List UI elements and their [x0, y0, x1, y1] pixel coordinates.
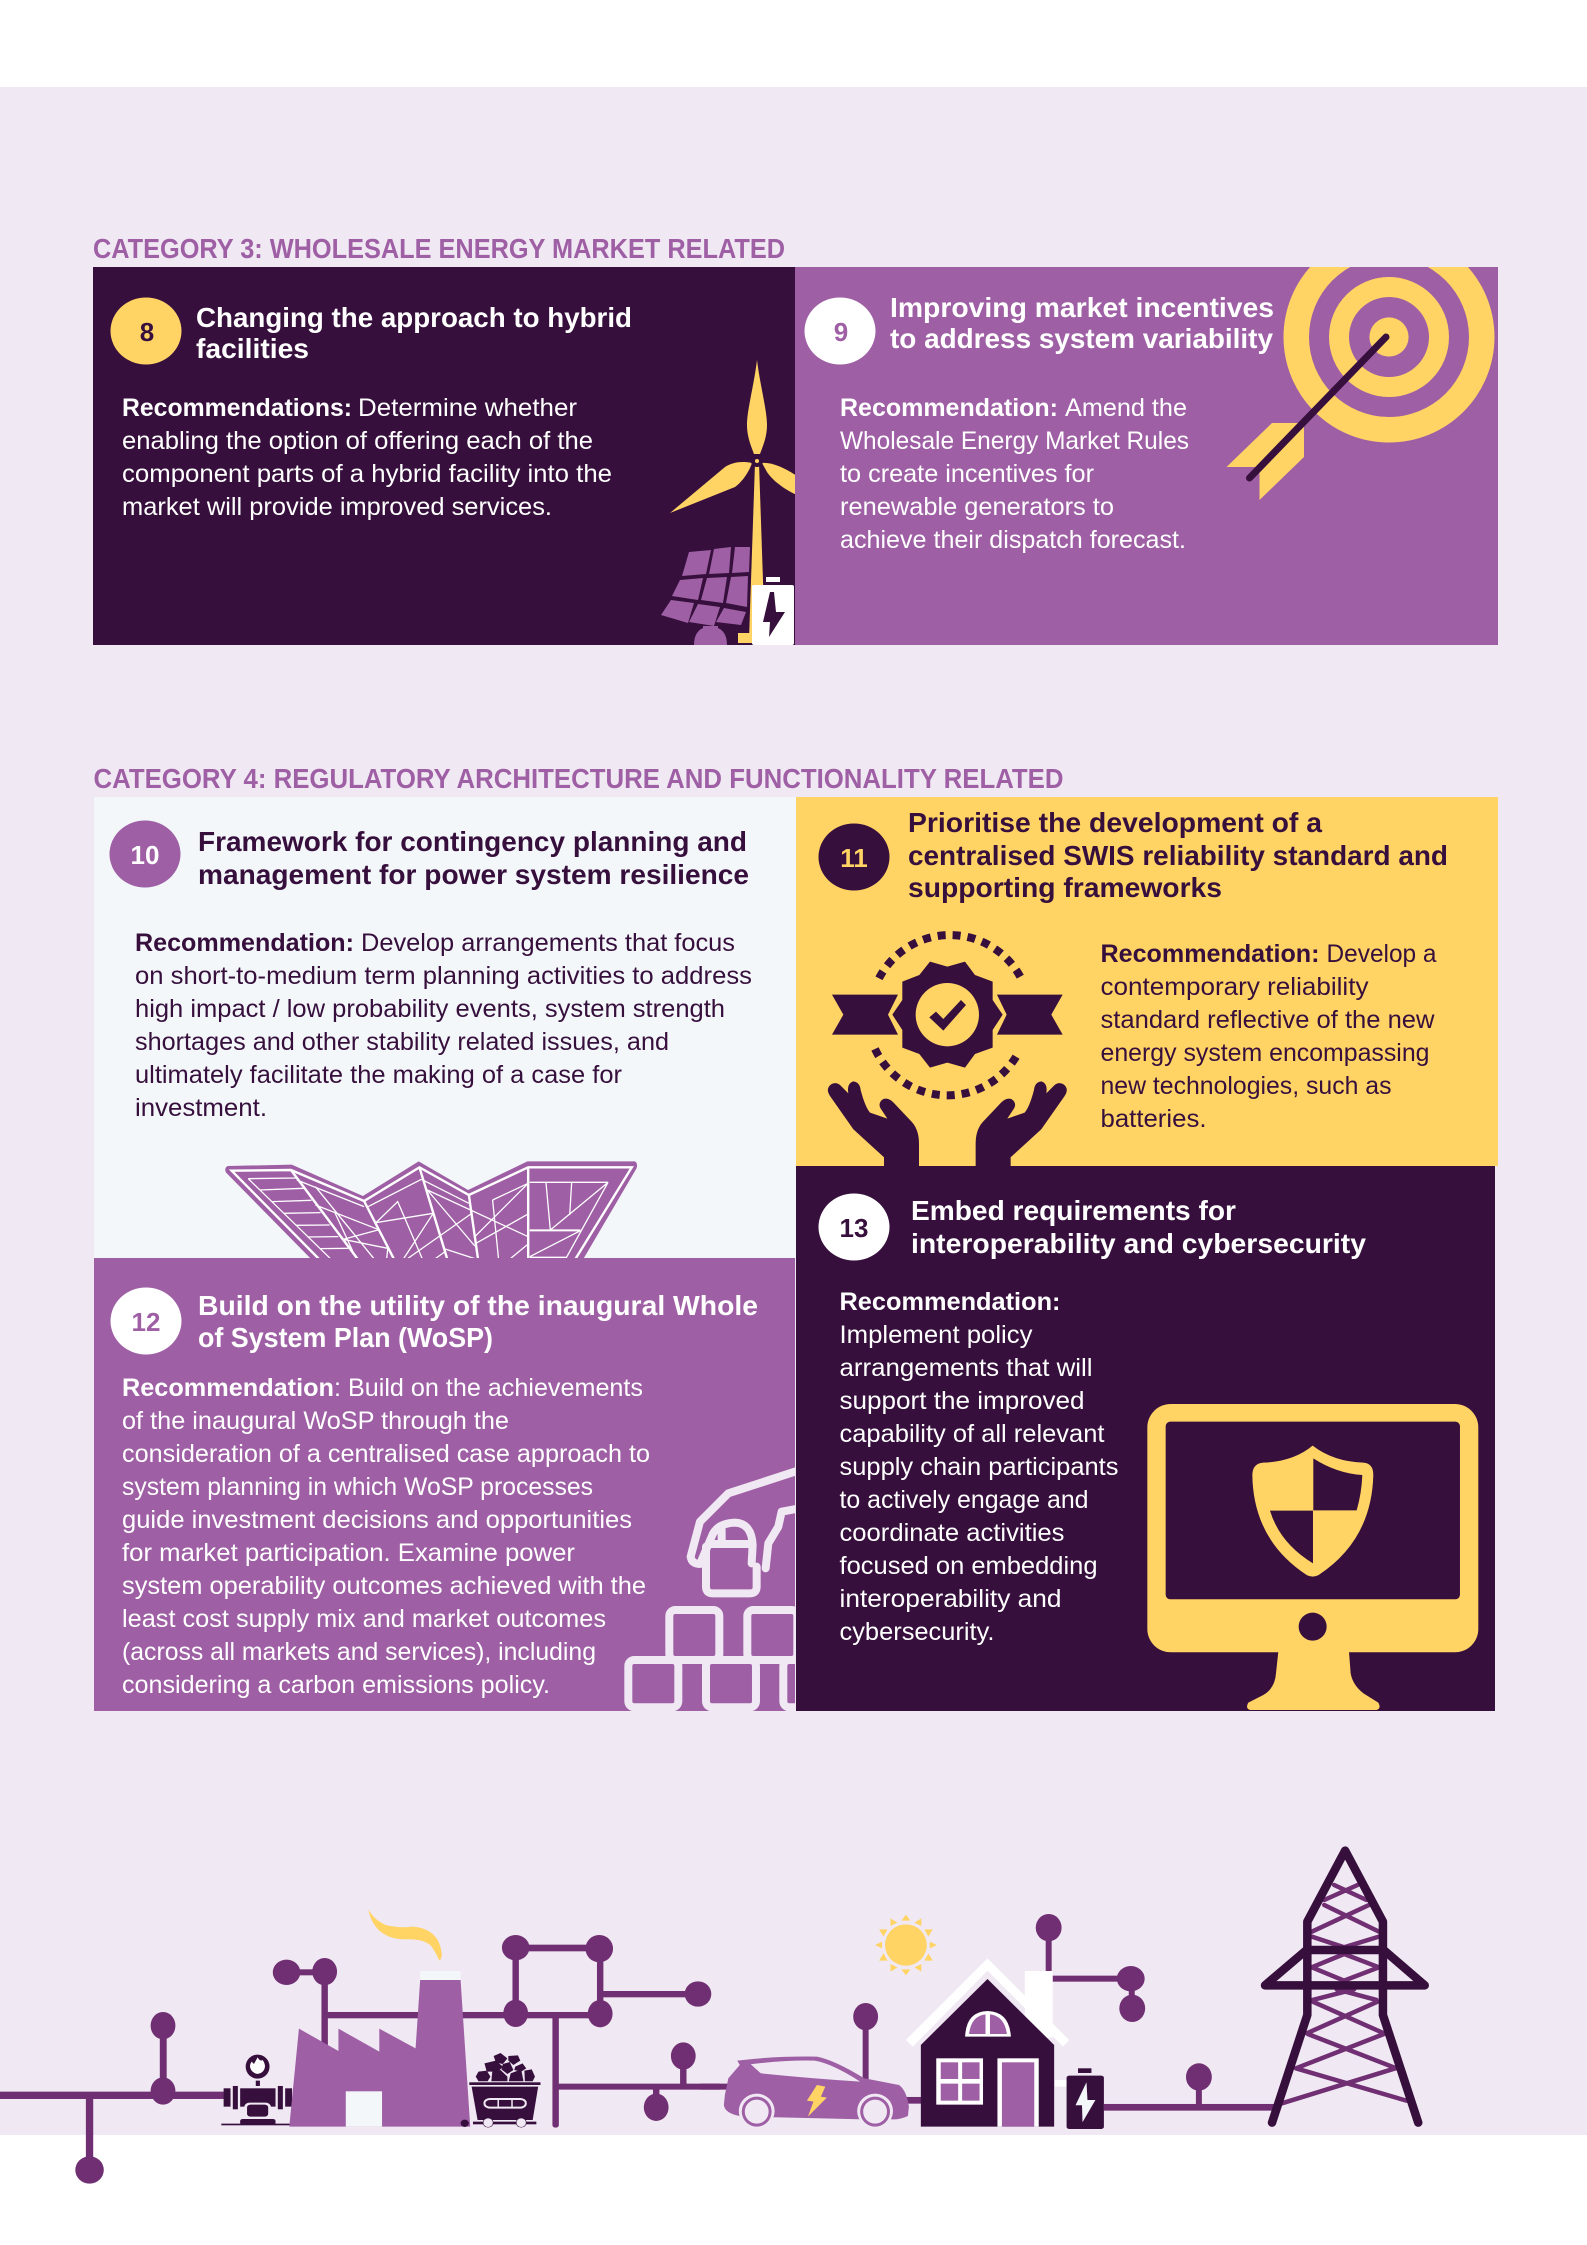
- heading 11: supporting frameworks: [908, 872, 1222, 903]
- text: recommendation 8: [122, 394, 612, 521]
- text: recommendation 9: Recommendation:: [840, 394, 1058, 422]
- text: recommendation 10: Develop arrangements that focus: [361, 929, 735, 957]
- icon: house: [906, 1958, 1069, 2127]
- number badge 8: 8: [140, 317, 154, 347]
- icon: hand placing blocks: [624, 1467, 795, 1711]
- text: recommendation 13: Recommendation:: [840, 1288, 1060, 1316]
- panel: 13 interoperability and cybersecurity: [796, 1166, 1495, 1711]
- icon: monitor with shield: [1147, 1404, 1478, 1710]
- panel: 8 hybrid facilities: [93, 267, 797, 645]
- heading: category 3: CATEGORY 3: WHOLESALE ENERGY MARKET RELATED: [93, 233, 785, 264]
- heading 12: of System Plan (WoSP): [198, 1322, 493, 1353]
- text: recommendation 11: Recommendation:: [1100, 940, 1320, 968]
- number badge 12: [110, 1288, 182, 1354]
- illustration: energy network, right part: [700, 1851, 1425, 2129]
- text: recommendation 8: component parts of a hybrid facility into the: [122, 460, 612, 488]
- heading 10: Framework for contingency planning and: [198, 826, 747, 857]
- text: recommendation 13: support the improved: [840, 1387, 1084, 1415]
- heading 11: [908, 807, 1448, 903]
- text: recommendation 13: cybersecurity.: [840, 1618, 994, 1646]
- heading 11: Prioritise the development of a: [908, 807, 1322, 838]
- text: recommendation 13: supply chain participants: [840, 1453, 1118, 1481]
- icon: gas valve: [221, 2055, 292, 2125]
- text: recommendation 13: arrangements that will: [840, 1354, 1092, 1382]
- icon: badge held by hands: [828, 935, 1067, 1167]
- heading 12: Build on the utility of the inaugural Whole: [198, 1290, 758, 1321]
- heading 10: [198, 826, 749, 890]
- heading 10: management for power system resilience: [198, 859, 749, 890]
- text: recommendation 9: [840, 394, 1189, 554]
- text: recommendation 11: contemporary reliability: [1100, 973, 1369, 1001]
- text: recommendation 10: ultimately facilitate the making of a case for: [135, 1061, 622, 1089]
- network lines right: [700, 1914, 1275, 2111]
- text: recommendation 12: [122, 1374, 650, 1699]
- text: recommendation 11: batteries.: [1100, 1105, 1206, 1133]
- text: recommendation 8: Determine whether: [358, 394, 577, 422]
- panel: 10 contingency planning: [94, 797, 796, 1259]
- text: recommendation 12: least cost supply mix and market outcomes: [122, 1605, 606, 1633]
- heading 12: [198, 1290, 758, 1353]
- heading 9: Improving market incentives: [890, 292, 1274, 323]
- text: recommendation 11: [1100, 940, 1437, 1133]
- number badge 11: [818, 824, 890, 890]
- text: recommendation 13: coordinate activities: [840, 1519, 1064, 1547]
- icon: electric car: [724, 2057, 909, 2128]
- network lines left: [0, 1935, 720, 2184]
- text: recommendation 10: on short-to-medium term planning activities to address: [135, 962, 752, 990]
- text: recommendation 12: system operability outcomes achieved with the: [122, 1572, 646, 1600]
- icon: sun: [875, 1915, 937, 1975]
- heading 8: Changing the approach to hybrid: [196, 302, 632, 333]
- text: recommendation 9: Amend the: [1065, 394, 1187, 422]
- number badge 12: 12: [132, 1307, 160, 1337]
- text: recommendation 12: for market participation. Examine power: [122, 1539, 575, 1567]
- text: recommendation 10: investment.: [135, 1094, 267, 1122]
- text: recommendation 13: capability of all relevant: [840, 1420, 1105, 1448]
- heading: category 4: CATEGORY 4: REGULATORY ARCHITECTURE AND FUNCTIONALITY RELATED: [94, 763, 1064, 794]
- icon: battery: [1067, 2068, 1104, 2129]
- text: recommendation 12: system planning in which WoSP processes: [122, 1473, 593, 1501]
- text: recommendation 11: standard reflective of the new: [1100, 1006, 1435, 1034]
- number badge 9: [804, 298, 876, 364]
- icon: wind turbine, solar panel and battery: [661, 360, 797, 645]
- heading 11: centralised SWIS reliability standard and: [908, 840, 1448, 871]
- heading 13: Embed requirements for: [911, 1195, 1236, 1226]
- icon: target with arrow: [1226, 267, 1494, 500]
- text: recommendation 9: to create incentives for: [840, 460, 1094, 488]
- text: recommendation 8: market will provide improved services.: [122, 493, 552, 521]
- text: recommendation 12: (across all markets and services), including: [122, 1638, 596, 1666]
- panel: 11 reliability standard: [796, 797, 1498, 1167]
- number badge 10: 10: [131, 840, 159, 870]
- text: recommendation 10: [135, 929, 752, 1122]
- icon: coal cart: [461, 2053, 540, 2127]
- number badge 9: 9: [834, 317, 848, 347]
- number badge 8: [110, 298, 182, 364]
- heading 8: [196, 302, 632, 364]
- panel: 12 whole of system plan: [94, 1258, 833, 1711]
- text: recommendation 12: guide investment decisions and opportunities: [122, 1506, 632, 1534]
- icon: factory: [289, 1909, 470, 2127]
- text: recommendation 13: interoperability and: [840, 1585, 1062, 1613]
- text: recommendation 10: Recommendation:: [135, 929, 354, 957]
- text: recommendation 11: Develop a: [1326, 940, 1437, 968]
- text: recommendation 12: Recommendation: [122, 1374, 334, 1402]
- text: recommendation 13: focused on embedding: [840, 1552, 1098, 1580]
- text: recommendation 12: : Build on the achievements: [334, 1374, 643, 1402]
- text: recommendation 13: [840, 1288, 1118, 1646]
- illustration: energy network, left part: [0, 1909, 720, 2184]
- icon: folded roof building: [225, 1161, 637, 1259]
- number badge 13: [818, 1194, 890, 1260]
- icon: transmission tower: [1265, 1851, 1425, 2123]
- heading 9: [890, 292, 1274, 354]
- text: recommendation 11: energy system encompassing: [1100, 1039, 1430, 1067]
- text: recommendation 13: Implement policy: [840, 1321, 1033, 1349]
- text: recommendation 12: considering a carbon emissions policy.: [122, 1671, 550, 1699]
- text: recommendation 12: of the inaugural WoSP through the: [122, 1407, 509, 1435]
- heading 8: facilities: [196, 333, 309, 364]
- text: recommendation 12: consideration of a centralised case approach to: [122, 1440, 650, 1468]
- text: recommendation 8: Recommendations:: [122, 394, 352, 422]
- panel: 9 market incentives: [795, 232, 1498, 645]
- number badge 11: 11: [840, 843, 868, 873]
- text: recommendation 10: high impact / low probability events, system strength: [135, 995, 725, 1023]
- text: recommendation 9: renewable generators to: [840, 493, 1114, 521]
- text: recommendation 11: new technologies, such as: [1100, 1072, 1392, 1100]
- number badge 10: [110, 820, 180, 888]
- text: recommendation 13: to actively engage and: [840, 1486, 1088, 1514]
- heading 9: to address system variability: [890, 323, 1273, 354]
- heading 13: [911, 1195, 1366, 1259]
- heading 13: interoperability and cybersecurity: [911, 1228, 1366, 1259]
- text: recommendation 9: achieve their dispatch forecast.: [840, 526, 1186, 554]
- text: recommendation 9: Wholesale Energy Market Rules: [840, 427, 1189, 455]
- number badge 13: 13: [840, 1213, 868, 1243]
- text: recommendation 8: enabling the option of offering each of the: [122, 427, 593, 455]
- text: recommendation 10: shortages and other stability related issues, and: [135, 1028, 669, 1056]
